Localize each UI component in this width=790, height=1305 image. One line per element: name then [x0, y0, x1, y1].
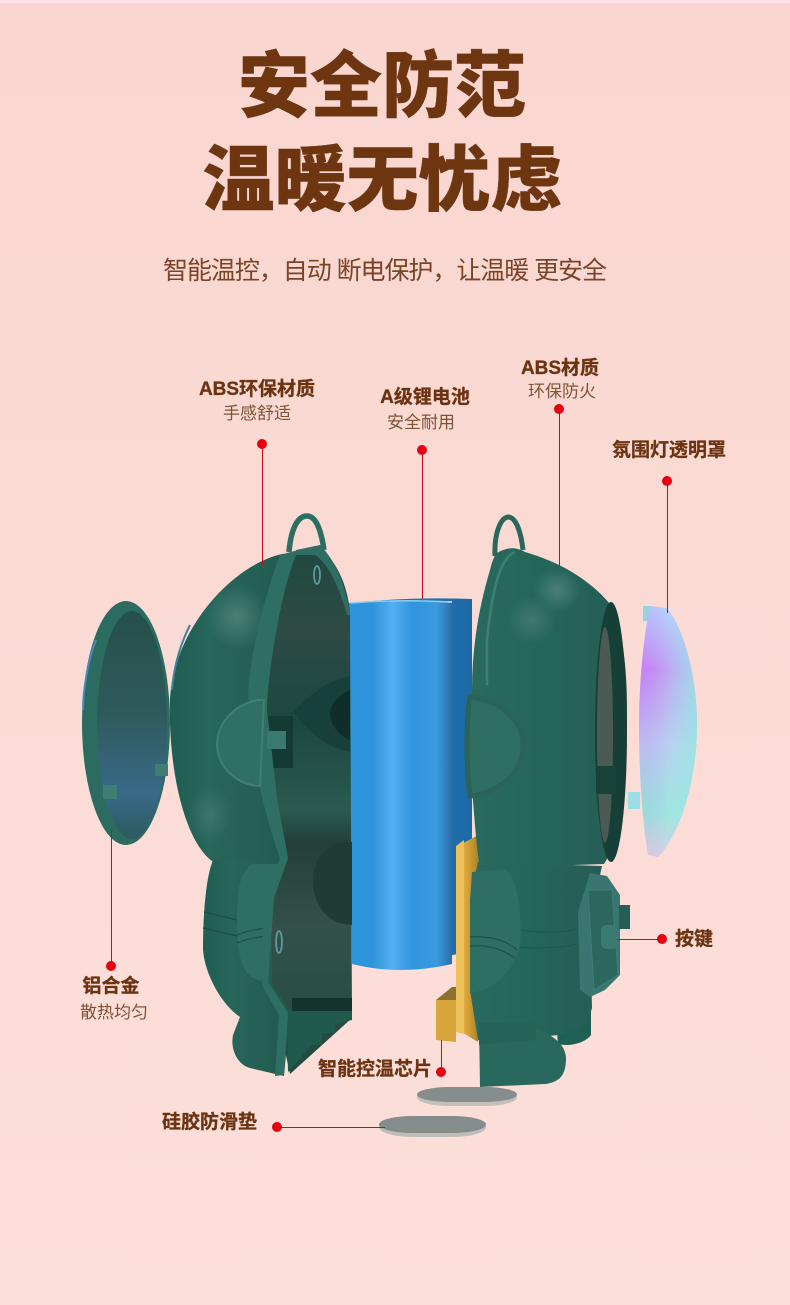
callout: aluminium — [80, 830, 148, 1022]
callout: ABS material: ABS材质 — [521, 356, 599, 379]
silicone pads — [379, 1087, 517, 1137]
rim band: head — [248, 550, 298, 858]
callout: chip: 智能控温芯片 — [318, 1057, 432, 1080]
lower body — [203, 858, 290, 1076]
upper pad — [417, 1088, 517, 1106]
interior fan — [293, 676, 350, 752]
stem — [267, 731, 286, 749]
gold control board — [436, 834, 480, 1042]
title: 温暖无忧虑 — [202, 141, 563, 221]
callout: button: 按键 — [675, 927, 713, 950]
belt pack — [578, 873, 620, 997]
head highlights — [207, 585, 267, 649]
battery cylinders — [349, 598, 472, 970]
callout: chip — [318, 1040, 446, 1080]
title: 安全防范 — [238, 47, 526, 127]
handle ring — [495, 517, 523, 556]
lower pad — [379, 1117, 486, 1137]
head shell — [170, 552, 298, 863]
ear — [217, 700, 264, 786]
callout: aluminium: 铝合金 — [82, 974, 140, 997]
rim band: top — [296, 545, 350, 615]
head rim — [487, 552, 515, 685]
ear — [467, 697, 523, 796]
body — [470, 862, 602, 1040]
callout: ABS material: 环保防火 — [528, 382, 596, 401]
callout: ABS eco material — [199, 377, 315, 566]
chip — [436, 1000, 456, 1042]
callout line: battery — [422, 450, 424, 602]
callout: lens — [612, 439, 726, 613]
callout: lens: 氛围灯透明罩 — [612, 439, 726, 461]
back cylinder — [373, 598, 472, 955]
rim band: lower — [262, 858, 288, 1076]
handle ring — [289, 516, 324, 552]
callout: silicone pad — [162, 1110, 385, 1133]
subtitle: 智能温控，自动 断电保护，让温暖 更安全 — [163, 257, 607, 285]
front cylinder — [349, 601, 452, 970]
callout: battery label: 安全耐用 — [387, 413, 455, 432]
callout: button — [617, 927, 713, 950]
arm — [237, 864, 283, 982]
callout: ABS eco material: ABS环保材质 — [199, 377, 315, 400]
front foot — [479, 1022, 566, 1087]
callout: ABS eco material: 手感舒适 — [223, 404, 291, 423]
callout: battery label: A级锂电池 — [380, 385, 470, 408]
interior — [262, 548, 352, 1074]
right shell — [467, 517, 630, 1087]
head — [472, 548, 627, 868]
rear foot — [555, 1010, 591, 1045]
face opening — [595, 602, 627, 862]
glow lens — [628, 606, 697, 857]
interior shelves — [287, 1010, 352, 1072]
callout: silicone pad: 硅胶防滑垫 — [162, 1110, 257, 1133]
screw holes — [314, 566, 320, 584]
arm — [470, 869, 520, 993]
knob — [619, 905, 630, 929]
callout: ABS material — [521, 356, 599, 566]
title — [202, 47, 563, 221]
left shell — [170, 516, 352, 1076]
interior lower blob — [313, 842, 352, 925]
callout: battery label — [380, 385, 470, 455]
disc tabs — [103, 785, 117, 799]
callout: aluminium: 散热均匀 — [80, 1003, 148, 1022]
aluminium cover disc — [82, 601, 170, 845]
